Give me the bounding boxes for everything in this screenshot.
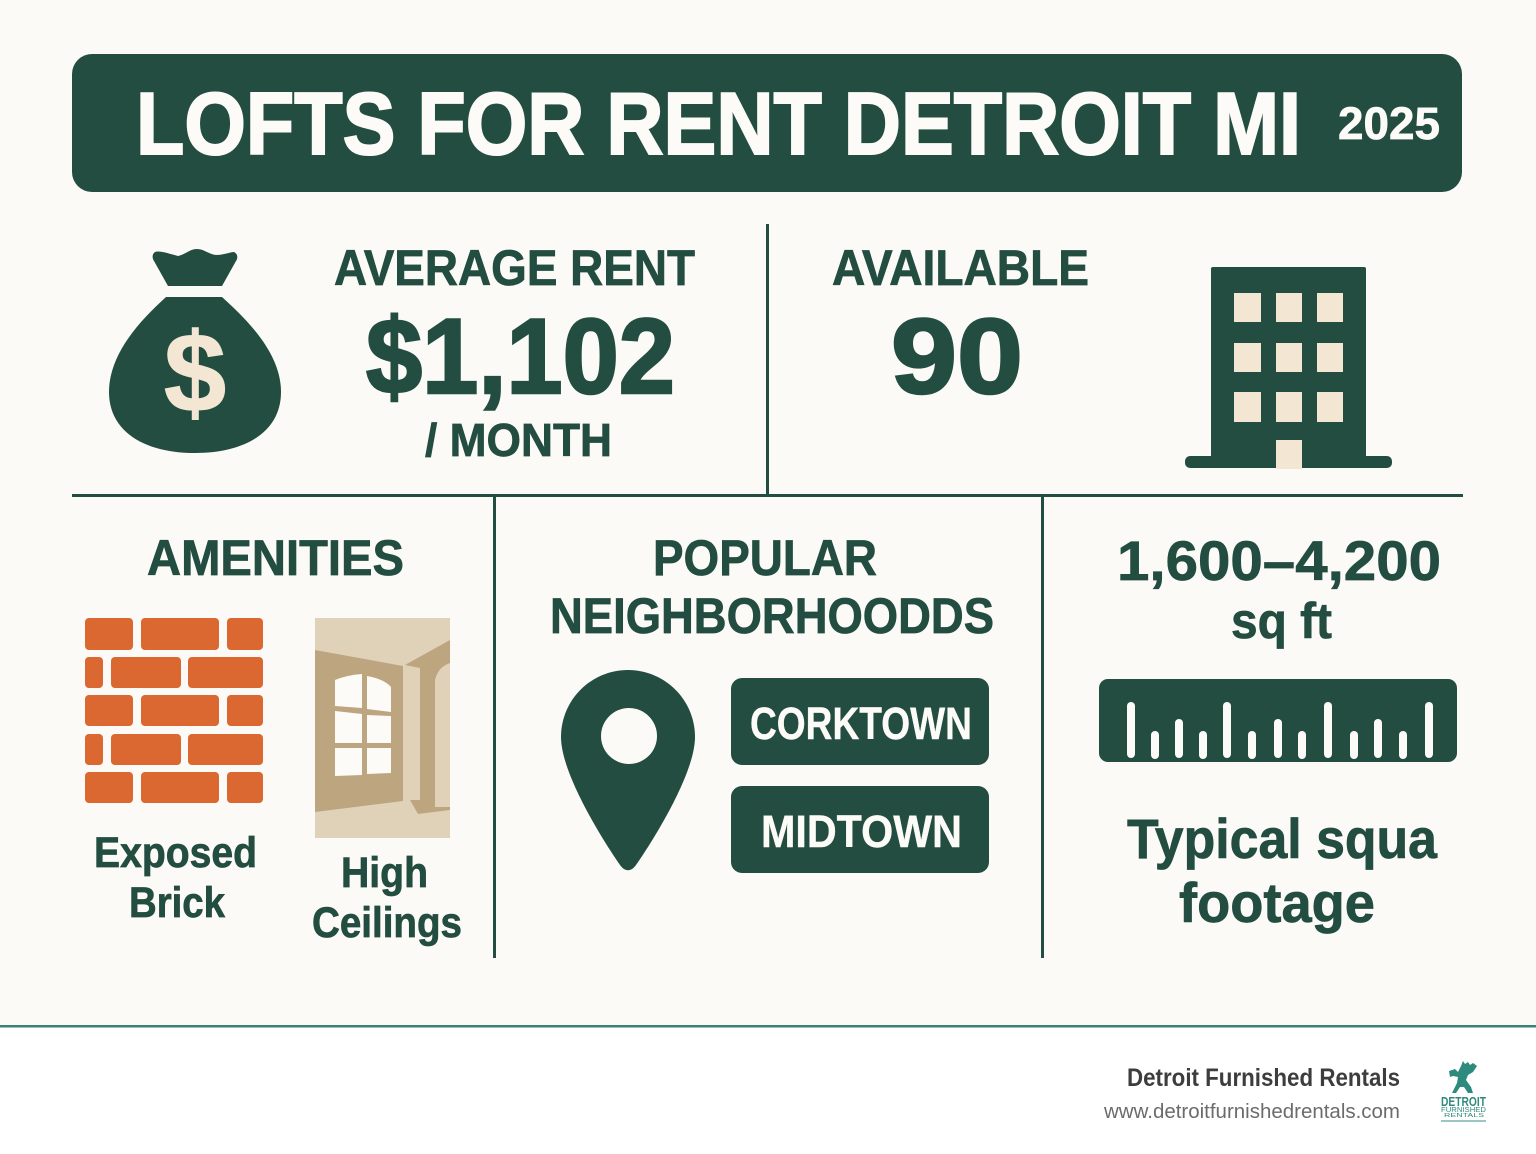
label: exposed brick: Exposed [94,829,257,877]
tag: midtown: MIDTOWN [761,806,962,857]
tag: midtown [731,786,989,873]
panel: popular neighborhoods [550,530,994,873]
logo: DETROIT [1441,1094,1486,1109]
value: rent amount: $1,102 [366,296,675,416]
logo: FURNISHED [1441,1107,1486,1114]
label: high ceilings: High [341,849,428,897]
heading: popular neighborhoods [550,530,994,644]
label: per month: / MONTH [425,414,612,466]
icon: map pin [561,670,695,870]
value: square footage range: 1,600–4,200 [1117,529,1441,592]
title: LOFTS FOR RENT DETROIT MI [136,74,1301,173]
footer [0,1025,1536,1154]
heading: available: AVAILABLE [832,240,1089,296]
icon: brick wall [85,618,263,803]
logo [1441,1061,1486,1122]
label: high ceilings [312,849,462,947]
value: square footage range [1117,529,1441,649]
icon: money bag [109,249,281,453]
icon: ruler [1099,679,1457,762]
icon: loft window with high ceilings [315,618,450,838]
panel: available [832,240,1392,469]
label: exposed brick: Brick [129,879,225,927]
value: square footage range: sq ft [1231,593,1332,649]
tag: corktown [731,678,989,765]
title banner [72,54,1462,192]
company name: Detroit Furnished Rentals [1127,1064,1400,1092]
value: available count: 90 [891,296,1023,416]
heading: popular neighborhoods: NEIGHBORHOODDS [550,588,994,644]
panel: average rent [109,240,695,466]
panel: amenities [85,530,462,947]
label: exposed brick [94,829,257,927]
panel: square footage [1099,529,1457,934]
icon: apartment building [1185,267,1392,469]
website: www.detroitfurnishedrentals.com [1103,1101,1400,1123]
heading: amenities: AMENITIES [147,530,404,586]
year: 2025 [1338,98,1440,149]
heading: average rent: AVERAGE RENT [334,240,695,296]
label: typical square footage: Typical squa [1127,807,1438,870]
icon: money bag: $ [164,310,226,435]
label: typical square footage: footage [1179,871,1375,934]
tag: corktown: CORKTOWN [750,698,972,749]
label: high ceilings: Ceilings [312,899,462,947]
logo: RENTALS [1444,1113,1485,1119]
label: typical square footage [1127,807,1438,934]
heading: popular neighborhoods: POPULAR [653,530,877,586]
